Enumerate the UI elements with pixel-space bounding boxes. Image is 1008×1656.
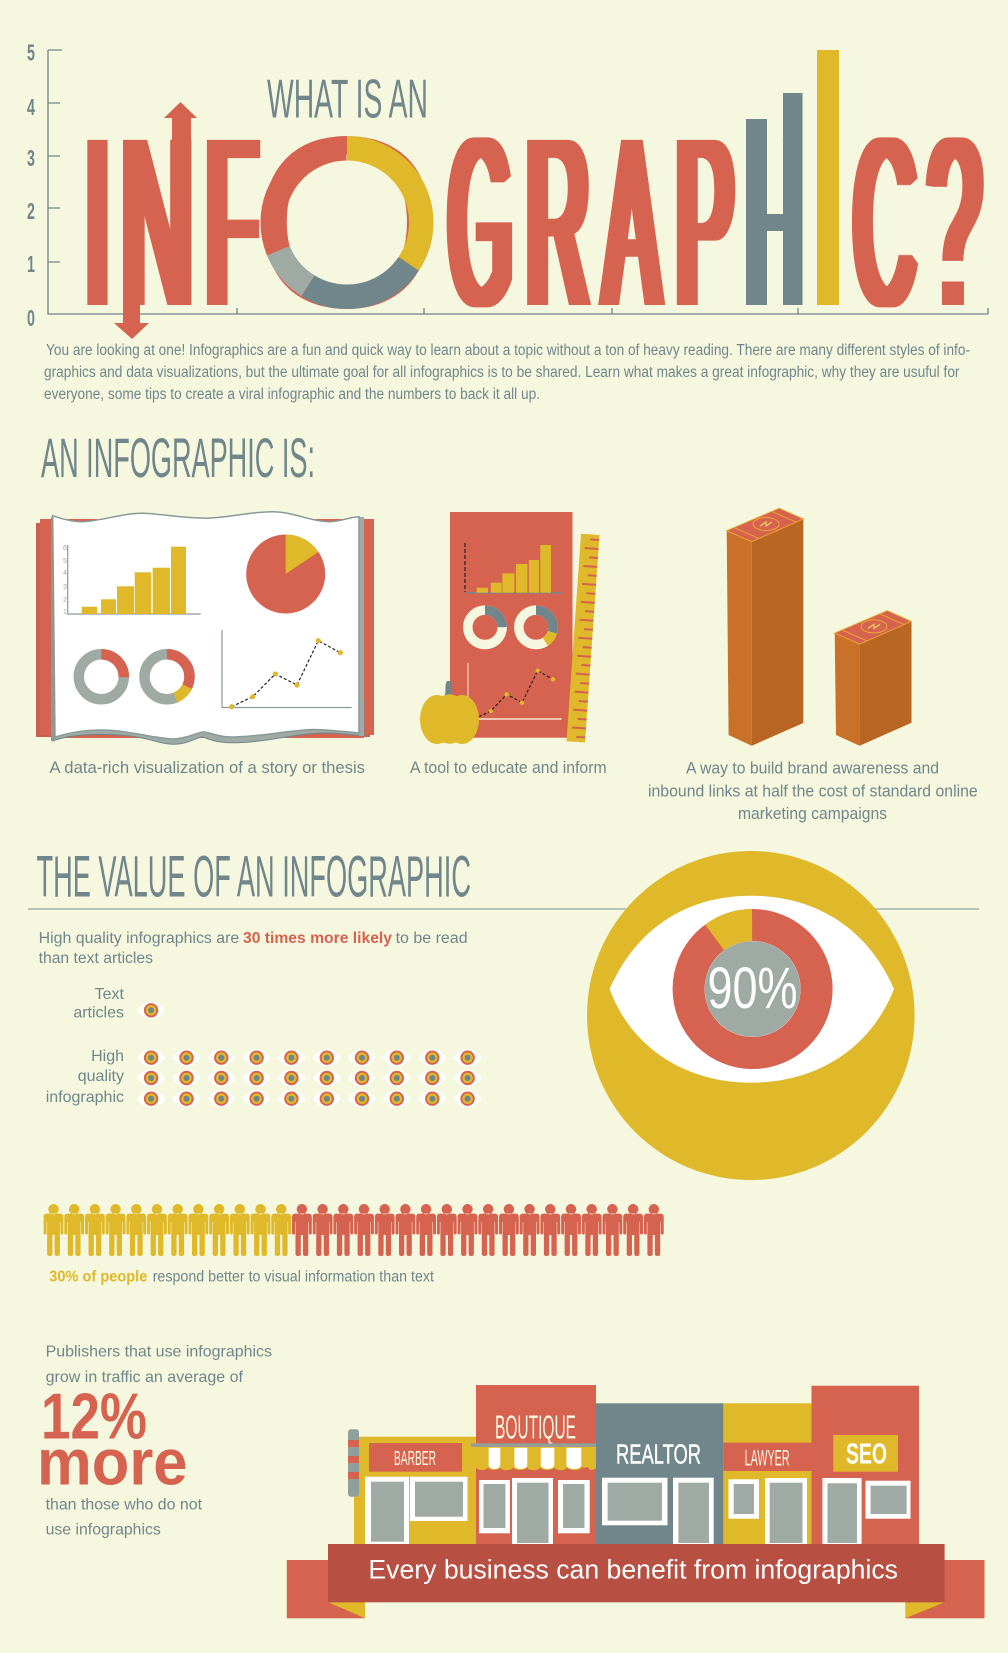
- illustration: open book with charts: [36, 512, 374, 744]
- label: high quality infographic: quality: [78, 1068, 124, 1085]
- text: publishers stat: [37, 1344, 272, 1538]
- label: text articles: articles: [73, 1005, 124, 1022]
- bar letter i: [817, 50, 839, 305]
- donut left on book: [468, 610, 502, 644]
- book cover: [36, 519, 374, 738]
- line chart on book: [468, 663, 562, 719]
- illustration: school book, apple and ruler: [420, 512, 600, 744]
- ribbon tails: [287, 1560, 984, 1618]
- bars in letter h: [746, 93, 802, 305]
- tall money stack: [727, 508, 803, 746]
- lawyer sign: [723, 1443, 812, 1471]
- book pages: [51, 512, 364, 744]
- text: 30 percent of people: respond better to visual information than text: [153, 1269, 435, 1286]
- caption: money: inbound links at half the cost of standard online: [648, 783, 978, 801]
- red book: [450, 512, 572, 738]
- text: 30 times more likely: 30 times more likely: [243, 930, 392, 947]
- pupil: [705, 941, 800, 1037]
- white of eye: [610, 896, 894, 1083]
- ribbon text: Every business can benefit from infographics: [368, 1554, 898, 1584]
- bar chart on left page: 6: [63, 545, 67, 552]
- chart axes: [48, 50, 988, 314]
- label: high quality infographic: High: [91, 1048, 124, 1065]
- bar chart on left page: 3: [63, 584, 67, 591]
- condensed title letters: H: [746, 88, 802, 356]
- label: text articles: Text: [95, 986, 125, 1003]
- condensed title letters: I: [87, 88, 108, 356]
- iris donut: [689, 925, 817, 1053]
- condensed title letters: R: [527, 89, 589, 357]
- big eye 90 percent: [587, 851, 915, 1180]
- bar chart on book: [465, 543, 562, 593]
- bar chart on left page: [63, 545, 201, 616]
- condensed title letters: I: [816, 89, 840, 357]
- condensed title letters: N: [122, 88, 193, 356]
- intro paragraph: everyone, some tips to create a viral infographic and the numbers to back it all up.: [44, 386, 540, 403]
- illustration: row of shops: [348, 1385, 919, 1544]
- axis numbers: 4: [27, 96, 35, 121]
- text: 30 times more likely: than text articles: [39, 950, 153, 967]
- bar chart on left page: 2: [63, 597, 67, 604]
- condensed title letters: A: [604, 88, 659, 356]
- intro paragraph: [44, 342, 970, 403]
- axis numbers: [27, 41, 35, 332]
- apple: [420, 681, 479, 744]
- caption: book tool: A tool to educate and inform: [410, 759, 607, 777]
- caption: money: [648, 760, 978, 823]
- condensed title letters: P: [676, 89, 733, 357]
- awning: [471, 1443, 596, 1470]
- seo sign: SEO: [846, 1438, 887, 1470]
- short money stack: [835, 611, 912, 746]
- donut chart right: [144, 654, 190, 699]
- yellow people: [44, 1204, 291, 1256]
- icon grid: thirty eyes: [137, 1049, 482, 1107]
- heading: what is an: WHAT IS AN: [267, 68, 428, 130]
- label: high quality infographic: infographic: [46, 1089, 124, 1106]
- stat: 12 percent more: more: [37, 1425, 188, 1498]
- lawyer shop: [723, 1403, 812, 1544]
- text: 30 times more likely: to be read: [396, 930, 468, 947]
- caption: money: A way to build brand awareness and: [686, 760, 939, 778]
- caption: book: A data-rich visualization of a story or thesis: [50, 759, 365, 777]
- bar chart on left page: 5: [63, 558, 67, 565]
- ribbon folds: [328, 1602, 945, 1618]
- ruler: [567, 534, 600, 742]
- realtor shop: [596, 1403, 723, 1544]
- axis numbers: 5: [27, 41, 35, 67]
- axis numbers: 1: [27, 253, 35, 278]
- stat: 12 percent more: 12%: [41, 1380, 147, 1452]
- hidden letter o under donut: O: [252, 86, 442, 358]
- text: THE VALUE OF AN INFOGRAPHIC: [36, 845, 471, 910]
- line chart: [222, 630, 352, 709]
- stat: 12 percent more: [37, 1380, 188, 1498]
- barber pole: [348, 1429, 359, 1497]
- red people: [292, 1204, 664, 1256]
- barber sign: BARBER: [394, 1448, 436, 1470]
- text: 30 percent of people: [49, 1269, 435, 1286]
- axis numbers: 2: [27, 200, 35, 225]
- label: text articles: [73, 986, 125, 1022]
- icon: single eye for text articles: [137, 1002, 165, 1019]
- bar chart on left page: 1: [63, 609, 67, 616]
- bar chart on left page: 4: [63, 570, 67, 577]
- header chart title: [27, 41, 988, 359]
- caption: money: marketing campaigns: [738, 805, 887, 823]
- text: AN INFOGRAPHIC IS:: [41, 426, 315, 489]
- title word: infographic: [87, 50, 981, 358]
- donut chart left: [79, 654, 124, 699]
- text: publishers stat: use infographics: [46, 1521, 161, 1538]
- ribbon band: [328, 1544, 945, 1602]
- yellow circle: [587, 851, 915, 1180]
- text: publishers stat: grow in traffic an average of: [46, 1369, 244, 1386]
- condensed title letters: C: [854, 89, 915, 357]
- text: 30 times more likely: High quality infographics are: [39, 930, 239, 947]
- donut right on book: [519, 610, 553, 644]
- text: publishers stat: Publishers that use infographics: [46, 1344, 272, 1361]
- boutique shop: BOUTIQUE: [495, 1408, 576, 1445]
- 90 percent value: 90%: [708, 956, 798, 1021]
- text: publishers stat: than those who do not: [46, 1496, 203, 1513]
- pictogram: row of people: [44, 1204, 664, 1256]
- lawyer sign: LAWYER: [745, 1446, 790, 1471]
- illustration: stacks of money bars: [727, 508, 912, 746]
- condensed title letters: G: [449, 88, 512, 356]
- text: 30 times more likely: [39, 930, 468, 967]
- pie chart: [246, 534, 325, 614]
- seo shop: [812, 1386, 919, 1544]
- condensed title letters: ?: [928, 88, 981, 356]
- text: 30 percent of people: 30% of people: [49, 1269, 148, 1286]
- ribbon banner: [287, 1544, 984, 1618]
- arrows in letter n: [114, 102, 197, 339]
- condensed title letters: F: [207, 90, 257, 357]
- boutique shop: [471, 1385, 596, 1544]
- realtor shop: REALTOR: [616, 1438, 701, 1469]
- axis numbers: 0: [27, 307, 35, 332]
- condensed title letters: [87, 88, 981, 357]
- barber shop: [348, 1429, 476, 1544]
- label: high quality infographic: [46, 1048, 124, 1106]
- seo sign: [833, 1435, 898, 1472]
- axis numbers: 3: [27, 147, 35, 172]
- donut letter o: [273, 148, 421, 297]
